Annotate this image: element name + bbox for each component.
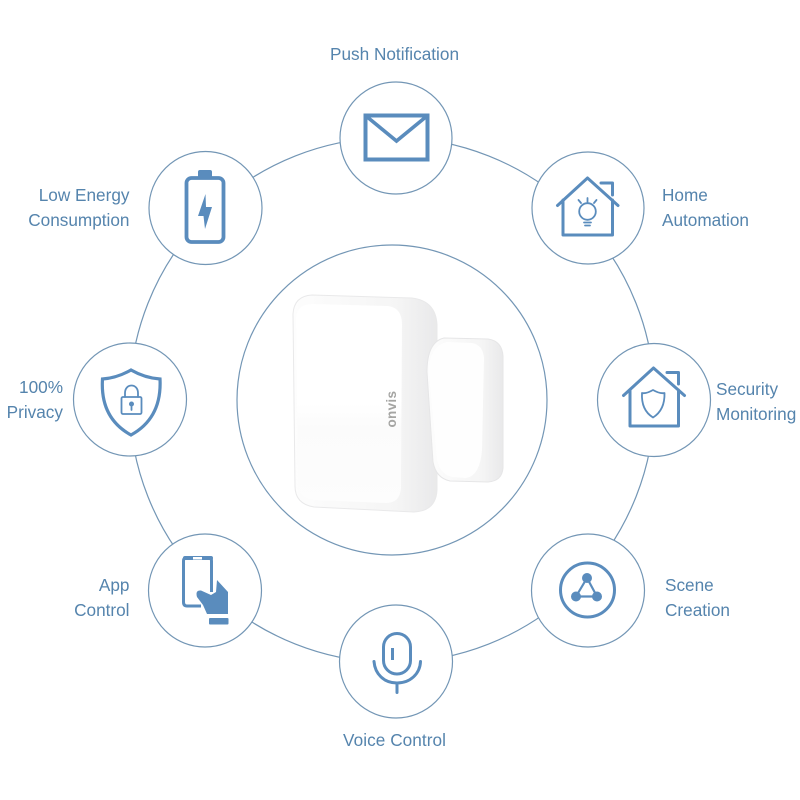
label: scene creation: Scene [665, 575, 714, 595]
brand label: onvis [384, 391, 399, 428]
label: low energy consumption: Low Energy [39, 185, 130, 205]
label: home automation [662, 185, 749, 230]
circle [149, 152, 262, 264]
label: low energy consumption [28, 185, 130, 230]
circle [532, 152, 644, 264]
label: home automation: Automation [662, 210, 749, 230]
sensor main body [293, 295, 437, 512]
label: security monitoring: Monitoring [716, 404, 796, 424]
product: door sensor [293, 295, 503, 512]
label: push notification: Push Notification [330, 44, 459, 64]
circle [532, 534, 644, 647]
label: app control: Control [74, 600, 130, 620]
label: scene creation [665, 575, 730, 620]
circle [340, 605, 452, 718]
label: scene creation: Creation [665, 600, 730, 620]
icon: envelope [366, 116, 428, 160]
label: app control: App [99, 575, 130, 595]
label: privacy [7, 377, 63, 422]
node: privacy [74, 343, 186, 456]
connecting ring [130, 138, 654, 662]
node: voice control [340, 605, 452, 718]
label: voice control: Voice Control [343, 730, 446, 750]
node: low energy [149, 152, 262, 264]
icon: network triangle [560, 563, 614, 617]
icon: house with bulb [558, 178, 618, 235]
circle [74, 343, 186, 456]
central circle [237, 245, 547, 555]
icon: house with shield [624, 368, 684, 426]
icon: shield with lock [102, 370, 160, 435]
icon: battery [186, 170, 224, 242]
label: home automation: Home [662, 185, 708, 205]
circle [598, 344, 710, 456]
label: privacy: 100% [19, 377, 63, 397]
icon: microphone [374, 634, 420, 692]
label: low energy consumption: Consumption [28, 210, 130, 230]
sensor magnet [427, 338, 503, 482]
label: security monitoring [716, 379, 796, 424]
node: push notification [340, 82, 452, 194]
circle [340, 82, 452, 194]
node: scene creation [532, 534, 644, 647]
label: security monitoring: Security [716, 379, 778, 399]
node: security monitoring [598, 344, 710, 456]
circle [148, 534, 262, 647]
node: app control [148, 534, 262, 647]
label: privacy: Privacy [7, 402, 63, 422]
node: home automation [532, 152, 644, 264]
icon: hand holding phone [183, 556, 228, 624]
label: app control [74, 575, 130, 620]
